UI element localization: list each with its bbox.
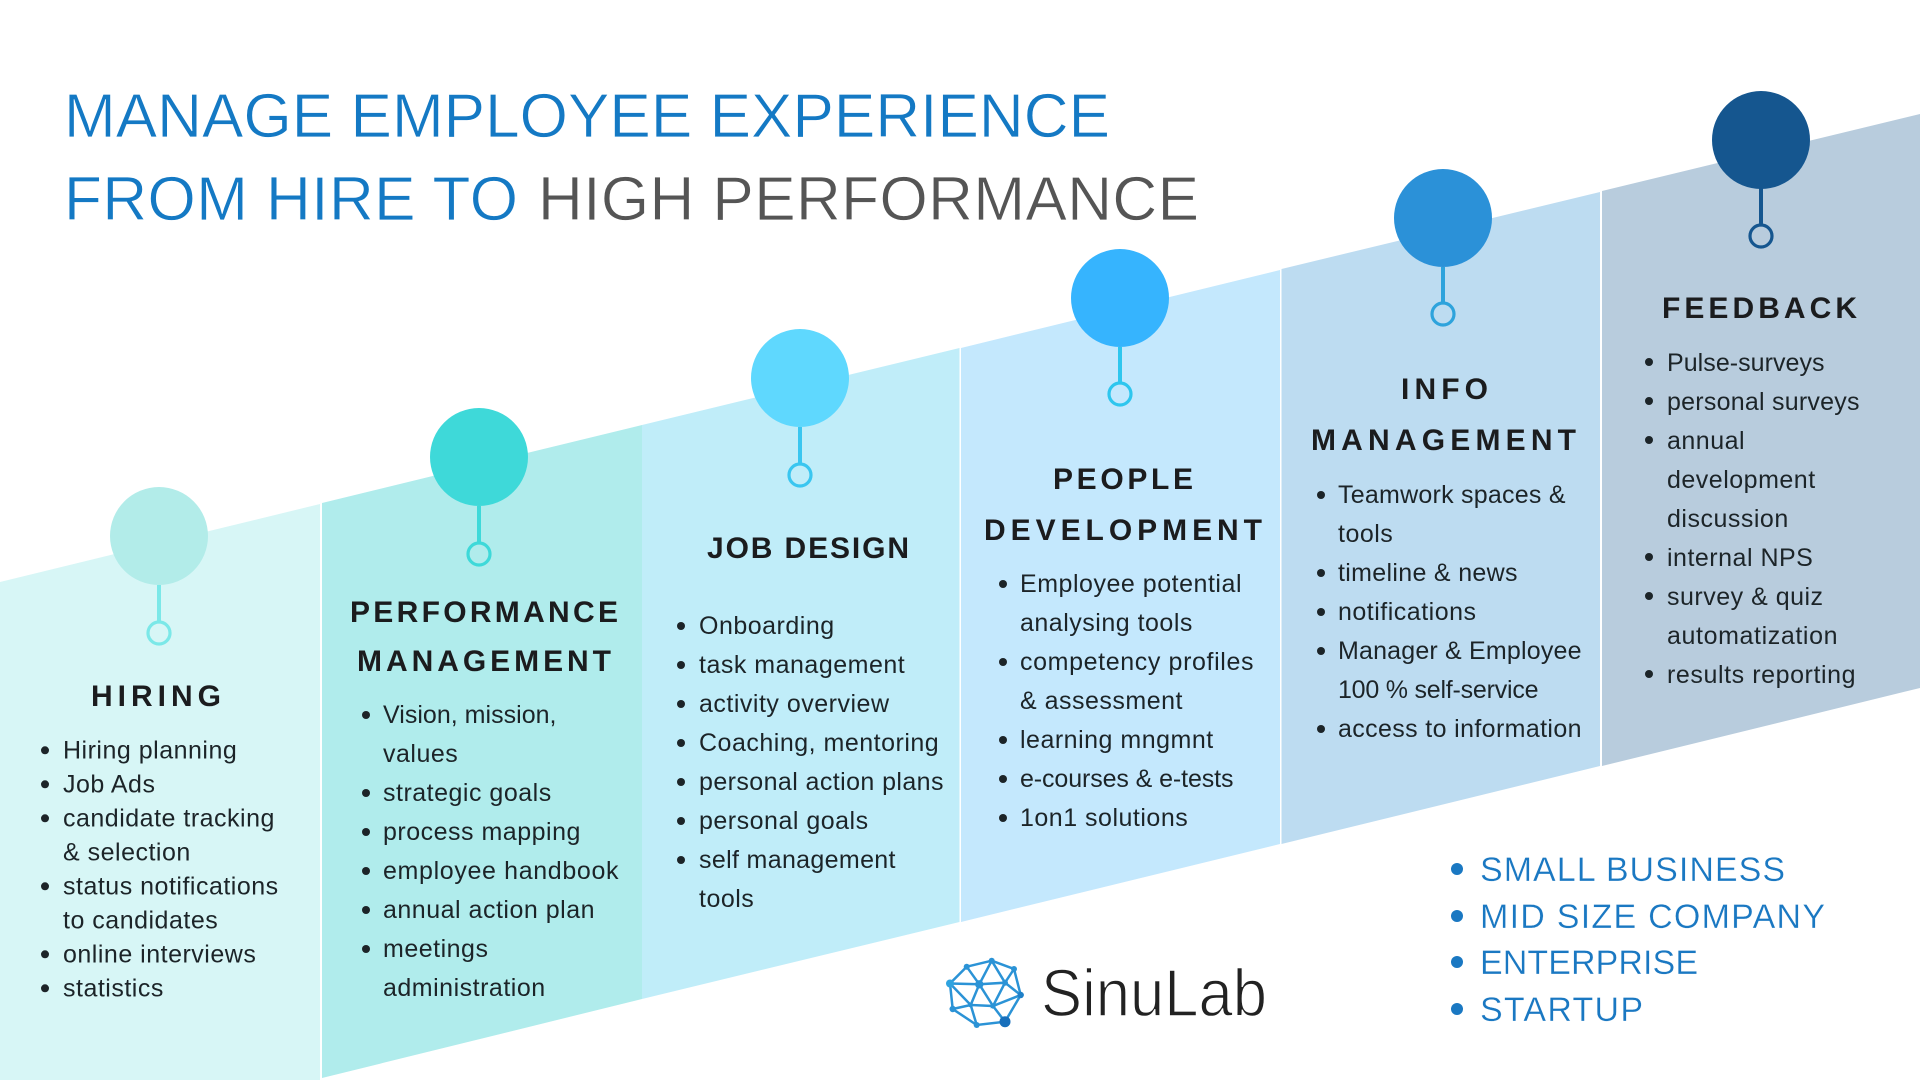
panel: performance management (322, 408, 642, 1078)
list: feedback: development (1667, 466, 1816, 494)
list: job design: task management (699, 651, 905, 679)
icon: performance pin (430, 408, 528, 565)
list: hiring: Job Ads (63, 770, 155, 798)
list: people development: 1on1 solutions (1020, 804, 1188, 832)
icon: SinuLab network logo (946, 958, 1024, 1028)
title: MANAGE EMPLOYEE EXPERIENCE (64, 82, 1110, 151)
list: feedback: results reporting (1667, 661, 1856, 689)
list: job design: Coaching, mentoring (699, 729, 939, 757)
list: feedback: automatization (1667, 622, 1838, 650)
list: company sizes: STARTUP (1480, 991, 1643, 1029)
icon: hiring pin (110, 487, 208, 644)
list: feedback: discussion (1667, 505, 1789, 533)
list: info management (1317, 481, 1582, 743)
icon: people development pin (1071, 249, 1169, 405)
list: feedback: survey & quiz (1667, 583, 1824, 611)
heading: people development (984, 463, 1262, 547)
list: people development: competency profiles (1020, 648, 1254, 676)
list: company sizes: MID SIZE COMPANY (1480, 898, 1825, 936)
list: performance management: strategic goals (383, 779, 552, 807)
list: info management: access to information (1338, 715, 1582, 743)
list: company sizes (1451, 851, 1825, 1029)
list: job design (677, 612, 944, 913)
title (64, 82, 1199, 234)
heading: info management: INFO (1401, 373, 1488, 406)
list: performance management: meetings (383, 935, 488, 963)
list: feedback: Pulse-surveys (1667, 349, 1825, 377)
heading: people development: PEOPLE (1053, 463, 1193, 496)
icon: feedback pin (1712, 91, 1810, 247)
list: hiring: statistics (63, 974, 164, 1002)
heading: info management (1311, 373, 1576, 457)
list: hiring: candidate tracking (63, 804, 275, 832)
list: info management: Manager & Employee (1338, 637, 1582, 665)
list: performance management: values (383, 740, 458, 768)
list: hiring: & selection (63, 838, 191, 866)
list: people development: analysing tools (1020, 609, 1193, 637)
list: performance management (362, 701, 619, 1002)
list: people development: learning mngmnt (1020, 726, 1214, 754)
list: performance management: employee handbook (383, 857, 619, 885)
logo wordmark: SinuLab (1041, 956, 1267, 1031)
list: people development: e-courses & e-tests (1020, 765, 1234, 793)
list: job design: self management (699, 846, 896, 874)
list: company sizes: SMALL BUSINESS (1480, 851, 1785, 889)
list: people development: & assessment (1020, 687, 1183, 715)
list: feedback: internal NPS (1667, 544, 1813, 572)
list: feedback (1645, 349, 1860, 689)
list: info management: 100 % self-service (1338, 676, 1539, 704)
list: job design: personal action plans (699, 768, 944, 796)
title: HIGH PERFORMANCE (538, 165, 1199, 234)
icon: info management pin (1394, 169, 1492, 325)
list: hiring: to candidates (63, 906, 218, 934)
heading: info management: MANAGEMENT (1311, 424, 1576, 457)
list: performance management: administration (383, 974, 546, 1002)
panel: info management (1282, 169, 1600, 844)
list: info management: tools (1338, 520, 1393, 548)
list: people development: Employee potential (1020, 570, 1242, 598)
list: job design: activity overview (699, 690, 890, 718)
list: performance management: process mapping (383, 818, 581, 846)
list: hiring (41, 736, 279, 1002)
list: people development (999, 570, 1254, 832)
heading: performance management (350, 596, 618, 678)
panel: people development (961, 249, 1280, 922)
heading: people development: DEVELOPMENT (984, 514, 1262, 547)
list: hiring: online interviews (63, 940, 256, 968)
list: feedback: personal surveys (1667, 388, 1860, 416)
heading: job design: JOB DESIGN (707, 532, 909, 565)
title: FROM HIRE TO (64, 165, 518, 234)
panel: job design (642, 329, 960, 999)
panel: hiring (0, 487, 320, 1080)
list: company sizes: ENTERPRISE (1480, 944, 1698, 982)
list: info management: timeline & news (1338, 559, 1518, 587)
heading: performance management: PERFORMANCE (350, 596, 618, 629)
list: hiring: status notifications (63, 872, 279, 900)
list: job design: Onboarding (699, 612, 835, 640)
list: feedback: annual (1667, 427, 1745, 455)
heading: performance management: MANAGEMENT (357, 645, 611, 678)
list: performance management: annual action plan (383, 896, 595, 924)
list: hiring: Hiring planning (63, 736, 237, 764)
list: job design: personal goals (699, 807, 869, 835)
list: info management: notifications (1338, 598, 1477, 626)
icon: job design pin (751, 329, 849, 486)
panel: feedback (1602, 91, 1920, 766)
heading: hiring: HIRING (91, 680, 221, 713)
list: job design: tools (699, 885, 754, 913)
list: info management: Teamwork spaces & (1338, 481, 1566, 509)
list: performance management: Vision, mission, (383, 701, 557, 729)
heading: feedback: FEEDBACK (1662, 292, 1857, 325)
